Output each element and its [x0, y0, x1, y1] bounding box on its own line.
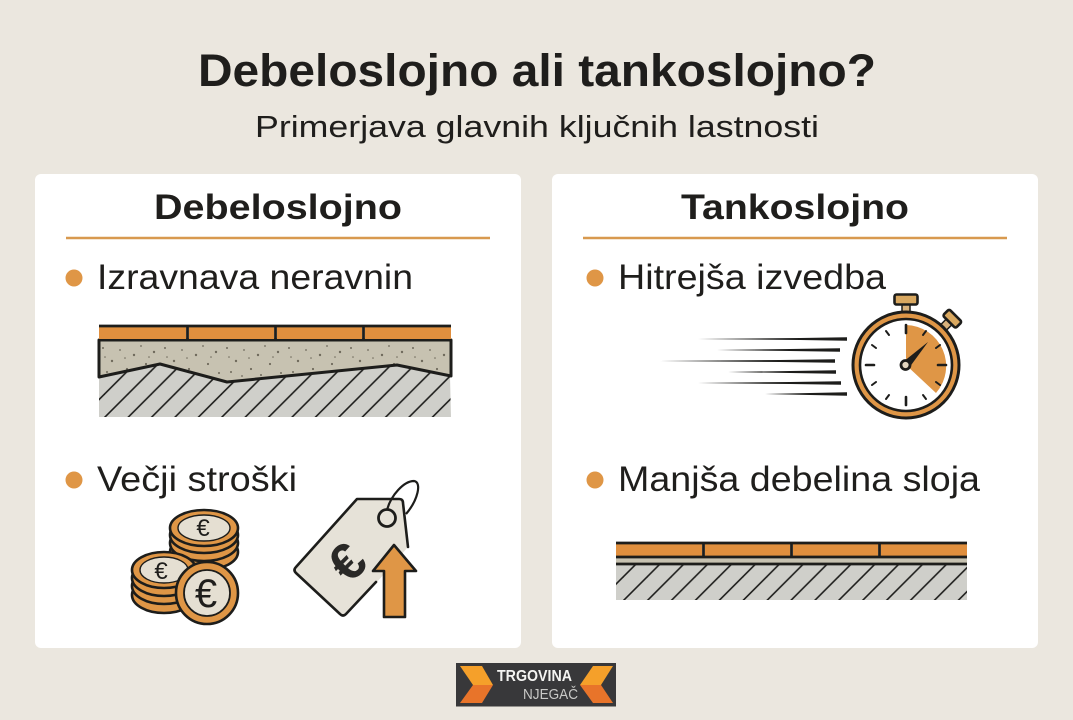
- panel heading: Tankoslojno: [681, 188, 909, 227]
- title: Debeloslojno ali tankoslojno?: [198, 45, 876, 96]
- icon: stopwatch: [853, 294, 962, 418]
- icon: stacks of euro coins: €: [196, 515, 210, 542]
- icon: stacks of euro coins: [132, 510, 238, 624]
- diagram: thin-bed layers over flat ground: [616, 543, 967, 600]
- panel background: [552, 174, 1038, 648]
- panel heading: Debeloslojno: [154, 188, 402, 227]
- logo: Trgovina Njegač: NJEGAČ: [523, 686, 578, 703]
- panel background: [35, 174, 521, 648]
- icon: speed lines: [660, 337, 847, 396]
- bullet: Manjša debelina sloja: Manjša debelina sloja: [618, 460, 981, 499]
- logo: Trgovina Njegač: TRGOVINA: [497, 668, 572, 685]
- subtitle: Primerjava glavnih ključnih lastnosti: [255, 109, 819, 144]
- icon: price tag with euro and rising arrow: €: [317, 532, 378, 593]
- bullet: Izravnava neravnin: Izravnava neravnin: [97, 258, 413, 297]
- icon: stacks of euro coins: €: [195, 572, 217, 616]
- panel: Debeloslojno: [35, 174, 521, 648]
- panel: Tankoslojno: [552, 174, 1038, 648]
- icon: stacks of euro coins: €: [154, 558, 168, 585]
- bullet: Hitrejša izvedba: Hitrejša izvedba: [618, 258, 887, 297]
- icon: price tag with euro and rising arrow: [294, 481, 418, 617]
- logo: Trgovina Njegač: [456, 663, 616, 706]
- diagram: thick-bed layers over uneven ground: [99, 326, 451, 417]
- bullet: Večji stroški: Večji stroški: [97, 460, 297, 499]
